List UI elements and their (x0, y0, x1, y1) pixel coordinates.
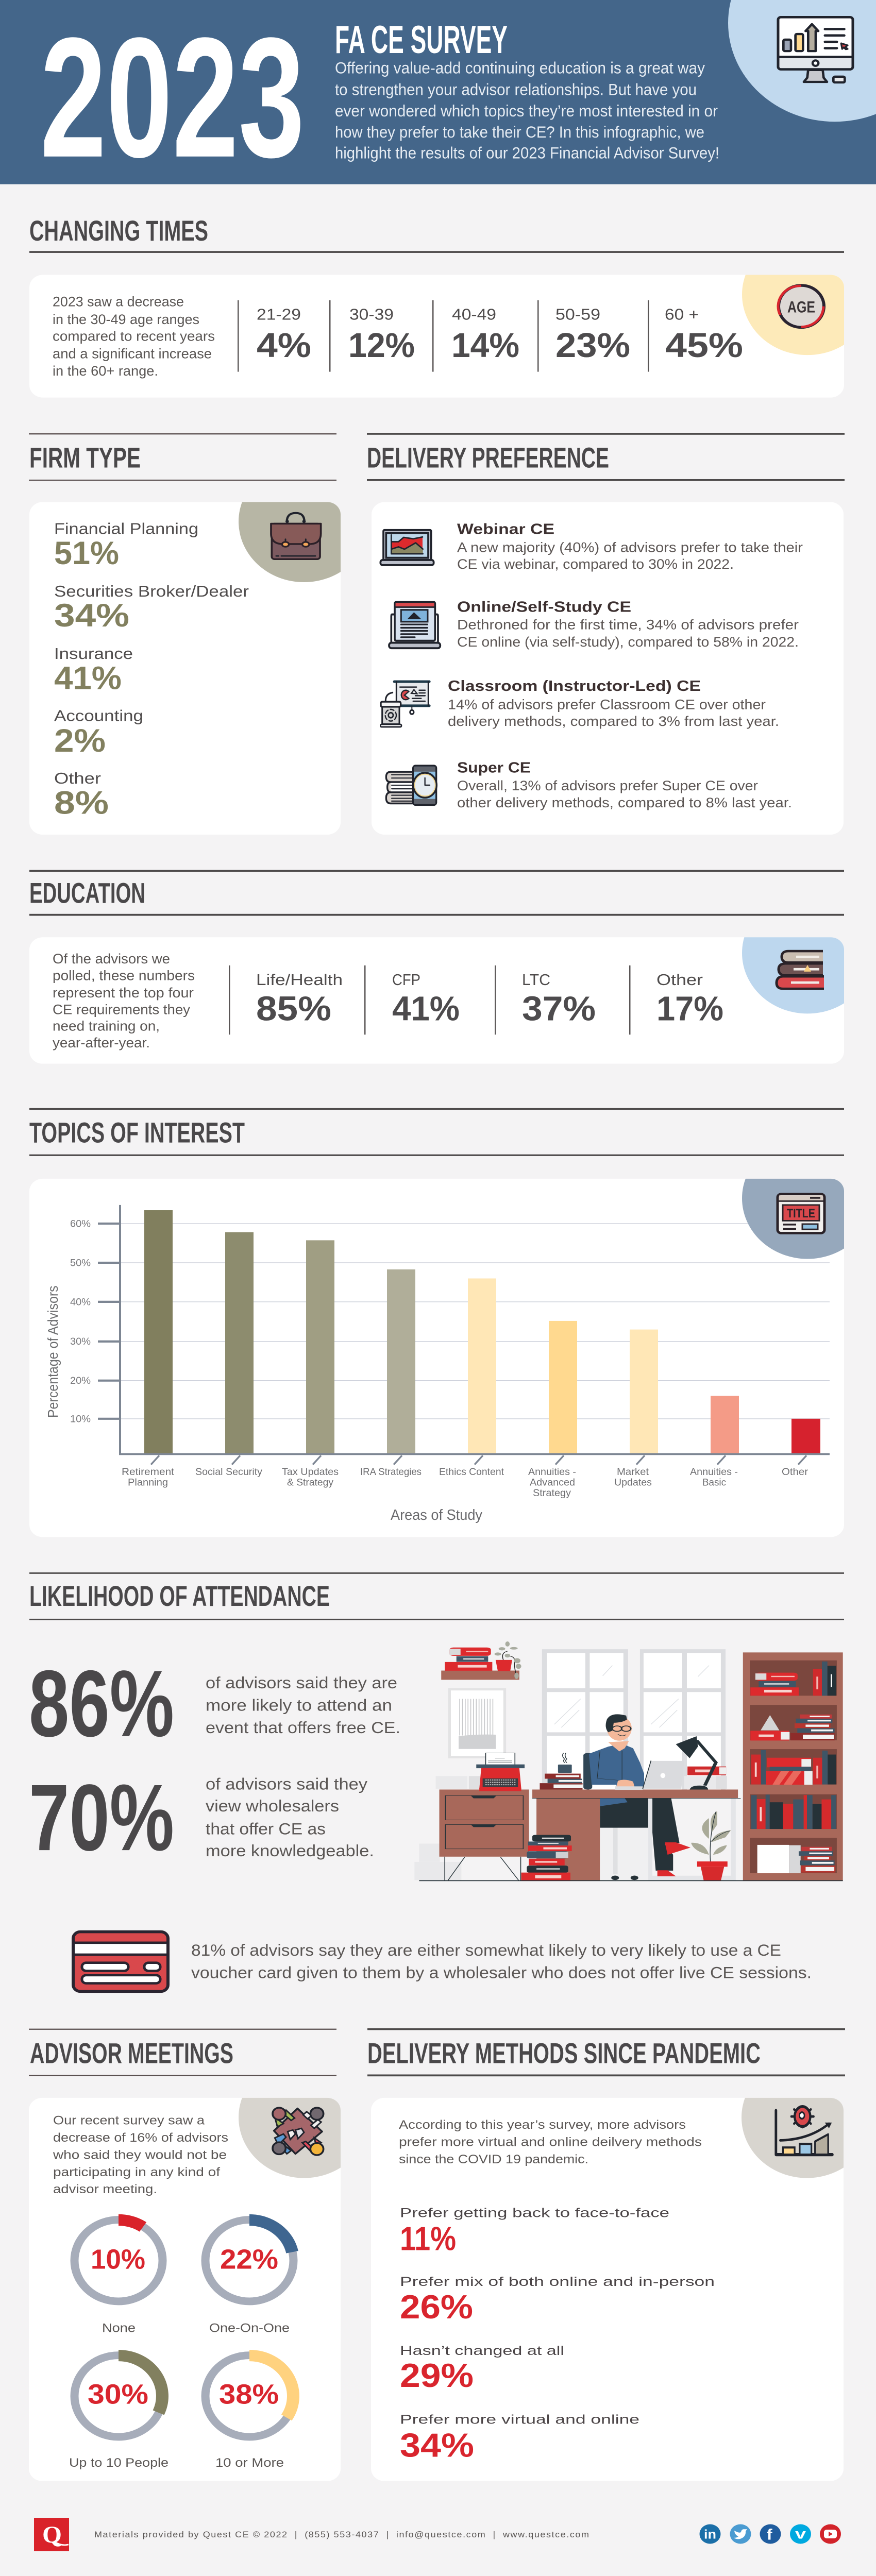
stat: 86% free CE: 86% (29, 1651, 174, 1756)
stat: mix 26%: Prefer mix of both online and in-person (400, 2274, 715, 2289)
icon: vimeo (790, 2524, 811, 2544)
category labels: Retirement (122, 1467, 174, 1478)
panel: changing times (29, 275, 844, 398)
stat: 86% free CE (29, 1651, 400, 1756)
icon: webinar laptop (380, 530, 434, 565)
stat: 50-59 (555, 306, 630, 364)
icon: facebook: f (767, 2526, 772, 2543)
y axis: 60% (70, 1218, 91, 1229)
donut: 10 or more 38%: 10 or More (215, 2456, 284, 2470)
text: advisor meetings intro: Our recent survey saw a (53, 2114, 205, 2128)
category labels: Ethics Content (439, 1467, 504, 1478)
text: online: CE online (via self-study), compared to 58% in 2022. (457, 634, 799, 650)
stat: life/health: 85% (256, 989, 331, 1028)
icon: books (777, 951, 824, 989)
stat: life/health: Life/Health (256, 971, 343, 989)
category labels: Market (617, 1467, 649, 1478)
stat: 21-29: 4% (257, 326, 311, 364)
icon: age: AGE (787, 298, 815, 316)
section heading: Likelihood of Attendance: LIKELIHOOD OF ATTENDANCE (29, 1581, 330, 1612)
text: online: Online/Self-Study CE (457, 599, 631, 615)
stat: 60+: 45% (665, 326, 743, 364)
logo: Quest: Q (42, 2522, 62, 2548)
callout: voucher card (73, 1932, 812, 1991)
intro paragraph: to strengthen your advisor relationships. But have you (335, 80, 697, 98)
stat: insurance (54, 645, 133, 696)
stat: ltc: 37% (522, 989, 596, 1028)
text: webinar: CE via webinar, compared to 30% in 2022. (457, 556, 734, 572)
category labels: Updates (614, 1477, 652, 1488)
donut: 10 or more 38%: 38% (219, 2379, 279, 2410)
stat: other: Other (54, 769, 101, 787)
shelf 5 papers and books (757, 1845, 835, 1873)
panel: topics of interest (29, 1179, 844, 1537)
text: education intro: represent the top four (53, 985, 194, 1001)
icon: youtube (820, 2524, 841, 2544)
stat: 60+ (665, 306, 743, 364)
shelf 4 books (751, 1794, 836, 1829)
logo: Quest (34, 2518, 69, 2551)
y axis: 50% (70, 1258, 91, 1268)
text: super ce: other delivery methods, compared to 8% last year. (457, 795, 792, 810)
stat: accounting (54, 707, 143, 758)
footer (34, 2518, 841, 2551)
title: 2023: 2023 (40, 3, 305, 193)
section heading: Education: EDUCATION (29, 877, 145, 909)
text: super ce: Super CE (457, 760, 531, 776)
stat: 70% wholesalers: of advisors said they (206, 1775, 368, 1793)
stat: 21-29: 21-29 (257, 306, 301, 323)
stat: securities broker/dealer: Securities Broker/Dealer (54, 582, 249, 600)
text: pandemic intro: prefer more virtual and online deilvery methods (399, 2135, 702, 2149)
stat: ltc: LTC (522, 971, 550, 989)
icon: virus and growth chart (776, 2107, 832, 2155)
stat: insurance: 41% (54, 660, 122, 696)
stat: ltc (522, 971, 596, 1028)
stat: 70% wholesalers (29, 1765, 374, 1871)
stat: financial planning: Financial Planning (54, 520, 198, 537)
header banner (0, 0, 876, 193)
accent circle (239, 2098, 341, 2178)
intro paragraph: Offering value-add continuing education is a great way (335, 59, 705, 77)
donut: 10 or more 38% (205, 2355, 294, 2470)
stat: financial planning (54, 520, 198, 571)
accent circle (742, 2098, 844, 2178)
text: advisor meetings intro: decrease of 16% of advisors (53, 2131, 228, 2145)
stat: face-to-face 11%: Prefer getting back to face-to-face (400, 2205, 669, 2220)
text: voucher statistic: 81% of advisors say they are either somewhat likely to very likely to use a CE (191, 1941, 781, 1959)
wall shelf with books and plant (441, 1641, 521, 1680)
stat: life/health (256, 971, 343, 1028)
text: advisor meetings intro: participating in any kind of (53, 2165, 220, 2179)
y axis: 40% (70, 1297, 91, 1308)
icon: facebook (760, 2524, 781, 2544)
y axis (70, 1205, 830, 1454)
icon: title page (778, 1194, 824, 1233)
stat: virtual 34%: 34% (400, 2427, 474, 2464)
accent circle (742, 937, 844, 1014)
category labels: Annuities - (528, 1467, 576, 1478)
icon: title page: TITLE (787, 1207, 815, 1221)
y axis title: Percentage of Advisors (45, 1285, 61, 1418)
typewriter (476, 1753, 525, 1791)
stat: accounting: 2% (54, 722, 106, 758)
stat: accounting: Accounting (54, 707, 143, 724)
floor book stack (521, 1835, 572, 1881)
accent circle (742, 1179, 844, 1259)
icon: briefcase (271, 513, 321, 559)
text: webinar: Webinar CE (457, 521, 554, 537)
icon: online self-study (389, 602, 440, 648)
bookcase (743, 1652, 843, 1880)
icon: age (778, 285, 824, 327)
stat: 70% wholesalers: more knowledgeable. (206, 1841, 374, 1860)
shelf 2 objects (750, 1715, 835, 1740)
text: advisor meetings intro: who said they would not be (53, 2148, 227, 2162)
text: education intro: year-after-year. (53, 1035, 150, 1050)
stat: 86% free CE: more likely to attend an (206, 1696, 392, 1714)
text: age intro: in the 30-49 age ranges (53, 312, 199, 327)
accent circle (239, 502, 341, 582)
chair (583, 1753, 648, 1881)
stat: 30-39 (348, 306, 415, 364)
laptop (643, 1760, 684, 1789)
stat: cfp: CFP (392, 971, 420, 989)
desk lamp and red book (676, 1736, 726, 1789)
text: education intro: polled, these numbers (53, 968, 195, 983)
framed picture (448, 1688, 506, 1758)
stat: financial planning: 51% (54, 535, 119, 571)
section heading: Delivery Methods Since Pandemic (367, 2028, 845, 2076)
text: advisor meetings intro: advisor meeting. (53, 2182, 157, 2196)
text: classroom: delivery methods, compared to 3% from last year. (448, 714, 779, 729)
stat: mix 26%: 26% (400, 2289, 473, 2326)
stat: 70% wholesalers: that offer CE as (206, 1820, 326, 1838)
window left (542, 1649, 628, 1789)
section heading: Delivery Preference (367, 433, 845, 481)
potted plant (691, 1811, 731, 1880)
text: pandemic intro: According to this year’s survey, more advisors (399, 2118, 686, 2132)
panel: firm type (29, 502, 341, 835)
icon: linkedin (700, 2524, 720, 2544)
coffee and desk books (540, 1753, 583, 1789)
stat: 40-49 (451, 306, 519, 364)
stat: other: 17% (656, 989, 723, 1028)
stat: virtual 34% (400, 2412, 639, 2464)
category labels: Planning (128, 1477, 168, 1488)
text: education intro: need training on, (53, 1019, 160, 1034)
donut: one-on-one 22%: 22% (220, 2243, 278, 2275)
donut: up to 10 people 30% (69, 2355, 169, 2470)
x axis title: Areas of Study (391, 1507, 482, 1523)
stat: 21-29 (257, 306, 311, 364)
text: age intro: and a significant increase (53, 346, 212, 361)
panel: education (29, 937, 844, 1063)
text: webinar (457, 521, 803, 572)
text: education intro: Of the advisors we (53, 951, 170, 967)
donut: up to 10 people 30%: Up to 10 People (69, 2456, 169, 2470)
section heading: Changing Times: CHANGING TIMES (29, 215, 208, 247)
stat: unchanged 29%: 29% (400, 2358, 474, 2395)
icon: monitor with chart (778, 17, 853, 82)
y axis: 10% (70, 1414, 91, 1425)
text: online: Dethroned for the first time, 34% of advisors prefer (457, 617, 799, 633)
intro paragraph (335, 59, 719, 162)
category labels: Tax Updates (282, 1467, 339, 1478)
filing cabinet (439, 1789, 529, 1880)
section heading: Topics of Interest (29, 1108, 844, 1156)
panel: advisor meetings (29, 2098, 341, 2481)
stat: mix 26% (400, 2274, 715, 2326)
text: age intro: 2023 saw a decrease (53, 294, 184, 309)
section heading: Changing Times (29, 215, 844, 253)
text: age intro: compared to recent years (53, 328, 215, 344)
icon: twitter (730, 2524, 751, 2544)
y axis: 30% (70, 1336, 91, 1347)
bar chart: areas of study (45, 1205, 830, 1523)
shelf 3 books (751, 1750, 836, 1785)
stat: securities broker/dealer: 34% (54, 597, 129, 634)
text: age intro (53, 294, 215, 379)
stat: 86% free CE: of advisors said they are (206, 1673, 397, 1692)
category labels: Basic (702, 1477, 726, 1488)
text: webinar: A new majority (40%) of advisors prefer to take their (457, 540, 803, 555)
text: super ce: Overall, 13% of advisors prefer Super CE over (457, 778, 758, 793)
donut: one-on-one 22%: One-On-One (209, 2321, 290, 2335)
text: voucher statistic (191, 1941, 812, 1981)
category labels: Other (782, 1467, 808, 1478)
icon: people at table (273, 2108, 324, 2155)
stat: other (54, 769, 109, 821)
intro paragraph: ever wondered which topics they’re most interested in or (335, 101, 718, 120)
stat: face-to-face 11%: 11% (400, 2221, 456, 2258)
text: classroom: Classroom (Instructor-Led) CE (448, 678, 701, 694)
text: education intro (53, 951, 195, 1050)
stat: 50-59: 23% (555, 326, 630, 364)
stat: 86% free CE: event that offers free CE. (206, 1718, 400, 1737)
stat: 60+: 60 + (665, 306, 699, 323)
icon: classroom (380, 682, 429, 727)
icon: linkedin: in (704, 2527, 716, 2542)
illustration: advisor at desk in office (414, 1641, 843, 1881)
stat: 70% wholesalers: view wholesalers (206, 1797, 339, 1815)
stat: 70% wholesalers: 70% (29, 1765, 174, 1871)
stat: 40-49: 40-49 (452, 306, 496, 323)
intro paragraph: highlight the results of our 2023 Financial Advisor Survey! (335, 144, 719, 162)
shelf 1 books (750, 1662, 836, 1696)
section heading: Topics of Interest: TOPICS OF INTEREST (29, 1117, 245, 1149)
stat: cfp: 41% (392, 989, 460, 1028)
icon: super ce (386, 766, 436, 805)
section heading: Firm Type: FIRM TYPE (29, 443, 141, 474)
stat: unchanged 29%: Hasn’t changed at all (400, 2343, 564, 2358)
text: education intro: CE requirements they (53, 1002, 190, 1017)
text: online (457, 599, 799, 650)
section heading: Delivery Preference: DELIVERY PREFERENCE (367, 443, 609, 474)
title: FA CE Survey: FA CE SURVEY (335, 18, 508, 61)
stat: other: 8% (54, 785, 109, 821)
section heading: Education (29, 870, 844, 916)
donut: none 10%: None (102, 2321, 136, 2335)
stat: 30-39: 30-39 (349, 306, 394, 323)
text: pandemic intro: since the COVID 19 pandemic. (399, 2153, 588, 2166)
icon: vimeo: v (795, 2527, 806, 2542)
stat: 30-39: 12% (348, 326, 415, 364)
text: advisor meetings intro (53, 2114, 228, 2196)
panel: delivery methods since pandemic (371, 2098, 844, 2481)
desk (532, 1789, 740, 1880)
text: contact line: Materials provided by Quest CE © 2022 | (855) 553-4037 | info@questce.com | www.questce.com (94, 2530, 589, 2539)
background paper stacks (414, 1776, 727, 1880)
advisor figure (583, 1714, 690, 1881)
stat: face-to-face 11% (400, 2205, 669, 2258)
category labels (122, 1467, 808, 1499)
floor line (419, 1879, 843, 1882)
panel: delivery preference (372, 502, 844, 835)
stat: insurance: Insurance (54, 645, 133, 663)
donut: none 10%: 10% (91, 2243, 145, 2275)
section heading: Advisor Meetings: ADVISOR MEETINGS (30, 2038, 233, 2070)
category labels: Social Security (195, 1467, 263, 1478)
category labels: & Strategy (287, 1477, 334, 1488)
stat: cfp (392, 971, 460, 1028)
bars (144, 1210, 820, 1453)
icon: voucher card (73, 1932, 168, 1991)
accent circle (742, 275, 844, 355)
donut: up to 10 people 30%: 30% (88, 2379, 148, 2410)
category labels: Advanced (530, 1477, 575, 1488)
stat: securities broker/dealer (54, 582, 249, 634)
text: voucher statistic: voucher card given to them by a wholesaler who does not offer live CE sessions. (191, 1963, 812, 1981)
text: pandemic intro (399, 2118, 702, 2166)
window right (640, 1649, 726, 1789)
donut: none 10% (74, 2220, 163, 2335)
stat: 50-59: 50-59 (555, 306, 600, 323)
category labels: IRA Strategies (360, 1467, 422, 1478)
y axis: 20% (70, 1376, 91, 1386)
stat: 40-49: 14% (451, 326, 519, 364)
stat: other (656, 971, 723, 1028)
stat: other: Other (656, 971, 703, 989)
text: classroom (448, 678, 779, 729)
text: classroom: 14% of advisors prefer Classroom CE over other (448, 697, 766, 712)
header accent circle (728, 0, 876, 122)
stat: unchanged 29% (400, 2343, 564, 2395)
donut: one-on-one 22% (205, 2220, 294, 2335)
text: age intro: in the 60+ range. (53, 363, 158, 379)
intro paragraph: how they prefer to take their CE? In this infographic, we (335, 123, 704, 141)
text: super ce (457, 760, 792, 810)
category labels: Annuities - (690, 1467, 738, 1478)
category labels: Strategy (533, 1488, 571, 1499)
stat: virtual 34%: Prefer more virtual and online (400, 2412, 639, 2427)
